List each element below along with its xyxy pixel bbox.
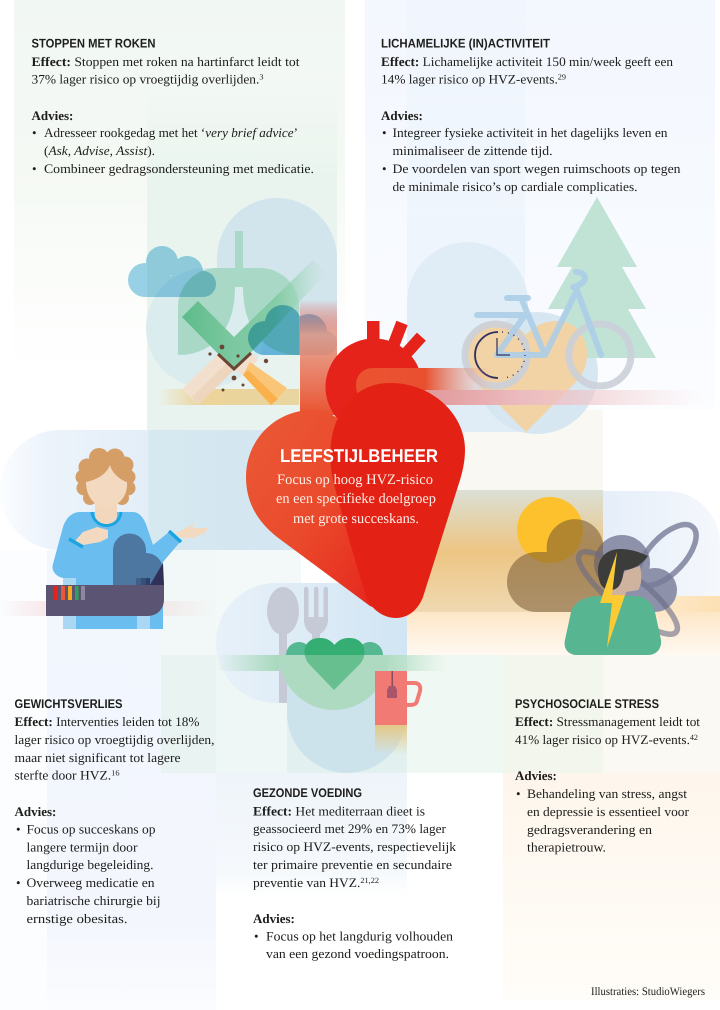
text block: gezonde voeding [253,786,457,961]
icon: green heart [304,638,365,690]
icon: face [86,465,127,507]
icon: ring brown [569,541,687,645]
bar: pink left [0,601,216,616]
icon: bowl [279,655,389,710]
icon: leaves [286,642,383,668]
icon: bicycle frame [477,272,601,355]
arch bottom [287,655,407,773]
text block: gezonde voeding: geassocieerd met 29% en 73% lager [253,821,447,836]
icon: cigarette left [182,354,234,405]
icon: mug fade [375,725,407,755]
icon: tree [538,197,656,358]
collar [92,512,121,526]
text block: gezonde voeding: preventie van HVZ. [253,875,357,890]
illustration: lichamelijke activiteit [407,197,656,434]
text block: gewichtsverlies: langdurige begeleiding. [26,857,154,872]
heart title: LEEFSTIJLBEHEER [280,445,438,466]
heart aorta [326,338,422,436]
text block: lichamelijke inactiviteit: Integreer fysieke activiteit in het dagelijks leven en [392,125,668,140]
text block: stoppen met roken: Combineer gedragsondersteuning met medicatie. [44,161,314,176]
icon: ash line [218,353,251,369]
illustration: psychosociale stress [507,497,706,655]
text block: lichamelijke inactiviteit: de minimale risico’s op cardiale complicaties. [392,179,638,194]
text block: lichamelijke inactiviteit: Effect: Lichamelijke activiteit 150 min/week geeft een [381,54,673,69]
icon: lightning [600,552,625,648]
heart text: met grote succeskans. [293,511,419,527]
icon: mug [375,671,407,725]
text block: lichamelijke inactiviteit: minimaliseer de zittende tijd. [392,143,552,158]
text block: lichamelijke inactiviteit: 14% lager risico op HVZ-events. [381,72,553,86]
icon: hair [598,549,648,590]
icon: hand on chest [74,527,108,545]
text block: lichamelijke inactiviteit: LICHAMELIJKE (IN)ACTIVITEIT [381,36,550,50]
text block: gewichtsverlies: sterfte door HVZ. [14,768,107,782]
text block: stoppen met roken: STOPPEN MET ROKEN [32,36,156,50]
heart text: Focus op hoog HVZ-risico [277,472,433,488]
text block: gezonde voeding: risico op HVZ-events, respectievelijk [253,839,457,854]
text block: gewichtsverlies: • [16,875,21,890]
text block: psychosociale stress: 42 [690,733,698,742]
text block: lichamelijke inactiviteit: • [382,125,387,140]
text block: psychosociale stress: Effect: Stressmanagement leidt tot [515,714,700,729]
bar: pink horizontal [400,390,706,405]
text block: gewichtsverlies: Advies: [14,804,56,819]
text block: stoppen met roken: • [32,125,37,140]
icon: ring purple [628,515,706,595]
bar: red horizontal [425,368,492,390]
arch behind lungs [217,198,337,355]
icon: spoon [267,587,299,703]
text block: gewichtsverlies: bariatrische chirurgie bij [26,893,160,908]
text block: stoppen met roken: • [32,161,37,176]
text block: gezonde voeding: Focus op het langdurig volhouden [266,928,454,944]
text block: stoppen met roken [32,36,314,176]
text block: lichamelijke inactiviteit [381,36,681,194]
text block: gezonde voeding: ter primaire preventie en secundaire [253,857,452,872]
text block: gewichtsverlies: • [16,822,21,836]
text block: stoppen met roken: 37% lager risico op vroegtijdig overlijden. [32,72,252,86]
bar: green horizontal [216,655,448,671]
text block: gezonde voeding: • [254,928,259,944]
text block: psychosociale stress: Advies: [515,768,557,783]
text block: gezonde voeding: 21,22 [360,876,379,885]
heart inner arch [356,368,425,395]
text block: gezonde voeding: GEZONDE VOEDING [253,786,362,800]
heart text: en een specifieke doelgroep [276,491,436,507]
text block: lichamelijke inactiviteit: Advies: [381,108,423,123]
icon: colour stripes [54,586,85,600]
text block: stoppen met roken: Advies: [32,108,73,123]
text block: stoppen met roken: Effect: Stoppen met roken na hartinfarct leidt tot [32,54,300,69]
text block: lichamelijke inactiviteit: 29 [558,72,566,82]
light bars from heart [0,300,706,616]
circle [476,312,598,434]
icon: brown cloud [507,519,603,612]
text block: gewichtsverlies: GEWICHTSVERLIES [14,697,122,711]
text block: psychosociale stress: 41% lager risico op HVZ-events. [515,732,687,747]
icon: shirt [52,512,180,629]
text block: gezonde voeding: Advies: [253,911,295,926]
text block: gewichtsverlies: Effect: Interventies leiden tot 18% [14,714,200,729]
icon: orange heart [465,321,587,432]
text block: psychosociale stress: PSYCHOSOCIALE STRESS [515,697,659,711]
heart left chamber [246,410,385,612]
text block: psychosociale stress [515,697,700,854]
icon: tape body [46,585,164,616]
text block: lichamelijke inactiviteit: De voordelen van sport wegen ruimschoots op tegen [392,161,681,176]
text block: gewichtsverlies: lager risico op vroegtijdig overlijden, [14,732,214,747]
shirt edge stripes [63,578,150,629]
illustration: stoppen met roken [128,198,337,405]
text block: psychosociale stress: gedragsverandering en [527,822,653,837]
text block: psychosociale stress: Behandeling van stress, angst [527,786,687,801]
icon: green torso [565,596,661,655]
cuff left [69,539,83,547]
text block: gezonde voeding: Effect: Het mediterraan dieet is [253,804,425,818]
icon: lungs [178,231,299,355]
arch left [216,583,407,703]
icon: fork [304,587,328,660]
icon: sand bar [158,389,299,405]
text block: lichamelijke inactiviteit: • [382,161,387,176]
bar: red vertical [300,300,337,415]
icon: cigarette right filter [243,362,287,405]
icon: tea bag [387,671,397,698]
heart aorta tubes [367,321,426,361]
text block: gewichtsverlies: 16 [111,768,120,778]
icon: neck [95,503,117,526]
icon: ash dots [208,345,268,392]
credit: Illustraties: StudioWiegers [591,986,705,998]
text block: stoppen met roken: 3 [259,72,264,82]
text block: gewichtsverlies: ernstige obesitas. [26,911,127,926]
heart right chamber [330,383,465,618]
cuff right [169,531,181,542]
illustration: gewichtsverlies [46,448,208,629]
text block: psychosociale stress: en depressie is essentieel voor [527,804,690,819]
arch [407,242,528,432]
lung backdrop circle [146,268,266,388]
icon: dark heart [113,534,163,585]
text block: gewichtsverlies [14,697,214,926]
icon: wheels [465,324,631,386]
illustration: gezonde voeding [216,583,448,773]
text block: gezonde voeding: van een gezond voedingspatroon. [266,946,449,961]
icon: cloud right [248,305,337,355]
heart text [276,472,436,527]
text block: psychosociale stress: • [516,786,521,801]
text block: gewichtsverlies: Focus op succeskans op [26,822,156,836]
text block: gewichtsverlies: langere termijn door [26,840,138,854]
icon: blue cloud [594,535,677,612]
heart [246,321,465,618]
text block: psychosociale stress: therapietrouw. [527,840,606,854]
icon: sun [517,497,583,563]
text block: gewichtsverlies: maar niet significant tot lagere [14,750,181,765]
text block: gewichtsverlies: Overweeg medicatie en [26,875,155,890]
icon: green check [182,260,327,370]
icon: cigarette left stripe [192,362,234,405]
icon: face [604,566,641,596]
icon: cigarette right [234,353,258,375]
icon: cloud left [128,246,216,297]
text block: stoppen met roken: Adresseer rookgedag met het ‘very brief advice’ [44,125,298,140]
text block: stoppen met roken: (Ask, Advise, Assist). [44,143,155,158]
icon: raised hand [175,522,208,538]
heart stripes [136,563,164,585]
icon: hair [76,448,136,505]
icon: mug handle [407,683,420,705]
heart top [304,638,364,655]
icon: cigarette right stripe [243,370,278,405]
icon: clock [475,332,525,378]
